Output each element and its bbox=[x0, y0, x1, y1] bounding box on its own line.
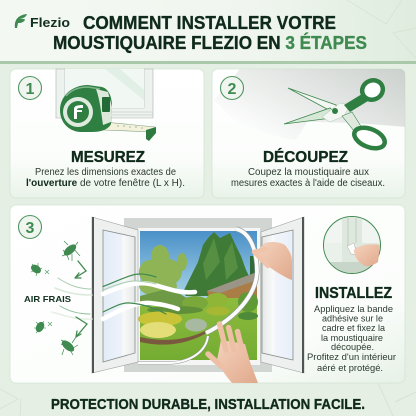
text: step 3 description: cadre et fixez la bbox=[322, 323, 386, 334]
footer slogan bbox=[0, 383, 416, 416]
panel: step 1 measure bbox=[10, 69, 204, 198]
icon: scissors bbox=[284, 77, 388, 152]
heading: MESUREZ: MESUREZ bbox=[71, 149, 146, 166]
air flow waves bbox=[103, 274, 195, 319]
upper hand bbox=[254, 242, 292, 280]
text: step 3 description: adhésive sur le bbox=[322, 314, 383, 324]
icon: mosquito bottom bbox=[60, 337, 78, 355]
air frais label bbox=[24, 278, 92, 319]
badge 3 bbox=[18, 216, 42, 238]
icon: beetle top bbox=[29, 263, 49, 276]
icon: tape measure bbox=[60, 85, 156, 141]
left open sash bbox=[92, 217, 138, 373]
text: step 1 description: Prenez les dimensions exactes de bbox=[35, 167, 176, 178]
text: step 2 description: mesures exactes à l'aide de ciseaux. bbox=[231, 178, 385, 189]
window outer frame bbox=[124, 218, 272, 372]
mesh sheet bbox=[214, 69, 405, 140]
title: COMMENT INSTALLER VOTRE bbox=[83, 13, 336, 33]
garden view bbox=[138, 231, 258, 360]
badge 3: 3 bbox=[26, 220, 35, 237]
icon: corner detail circle bbox=[323, 216, 381, 274]
badge 2 bbox=[220, 76, 244, 100]
title: MOUSTIQUAIRE FLEZIO EN 3 ÉTAPES bbox=[53, 32, 367, 53]
arrow: bottom deflection bbox=[76, 317, 87, 337]
title bbox=[53, 13, 367, 53]
text: step 1 description: l'ouverture de votre fenêtre (L x H). bbox=[26, 178, 185, 189]
window illustration bbox=[92, 217, 304, 383]
panel: step 3 install bbox=[10, 205, 405, 383]
text: step 1 description bbox=[26, 167, 185, 189]
window frame behind tape bbox=[56, 69, 153, 118]
text: step 3 description: la moustiquaire bbox=[321, 333, 383, 344]
lower hand bbox=[208, 324, 258, 383]
header band bbox=[0, 0, 416, 64]
badge 1: 1 bbox=[26, 81, 35, 98]
text: step 3 description: aéré et protégé. bbox=[317, 363, 383, 374]
icon: beetle bottom bbox=[34, 320, 52, 334]
right open sash bbox=[261, 217, 304, 373]
logo: Flezio bbox=[15, 14, 70, 30]
text: step 3 description: Appliquez la bande bbox=[314, 304, 393, 315]
text: step 3 description: découpée. bbox=[331, 342, 374, 353]
badge 1 bbox=[18, 76, 42, 100]
heading: DÉCOUPEZ: DÉCOUPEZ bbox=[263, 149, 349, 166]
peeled mesh strip bbox=[138, 229, 257, 363]
arrow: top deflection bbox=[75, 261, 86, 278]
text: step 2 description bbox=[231, 167, 385, 189]
text: step 3 description bbox=[307, 304, 396, 374]
heading: INSTALLEZ: INSTALLEZ bbox=[315, 285, 392, 302]
badge 2: 2 bbox=[228, 81, 237, 98]
icon: mosquito top bbox=[62, 241, 80, 261]
panel: step 2 cut bbox=[212, 69, 405, 198]
logo: Flezio: Flezio bbox=[30, 15, 70, 30]
footer slogan: PROTECTION DURABLE, INSTALLATION FACILE. bbox=[51, 396, 365, 413]
text: step 2 description: Coupez la moustiquaire aux bbox=[248, 167, 369, 178]
text: step 3 description: Profitez d'un intérieur bbox=[307, 352, 396, 363]
air frais label: AIR FRAIS bbox=[24, 294, 71, 304]
